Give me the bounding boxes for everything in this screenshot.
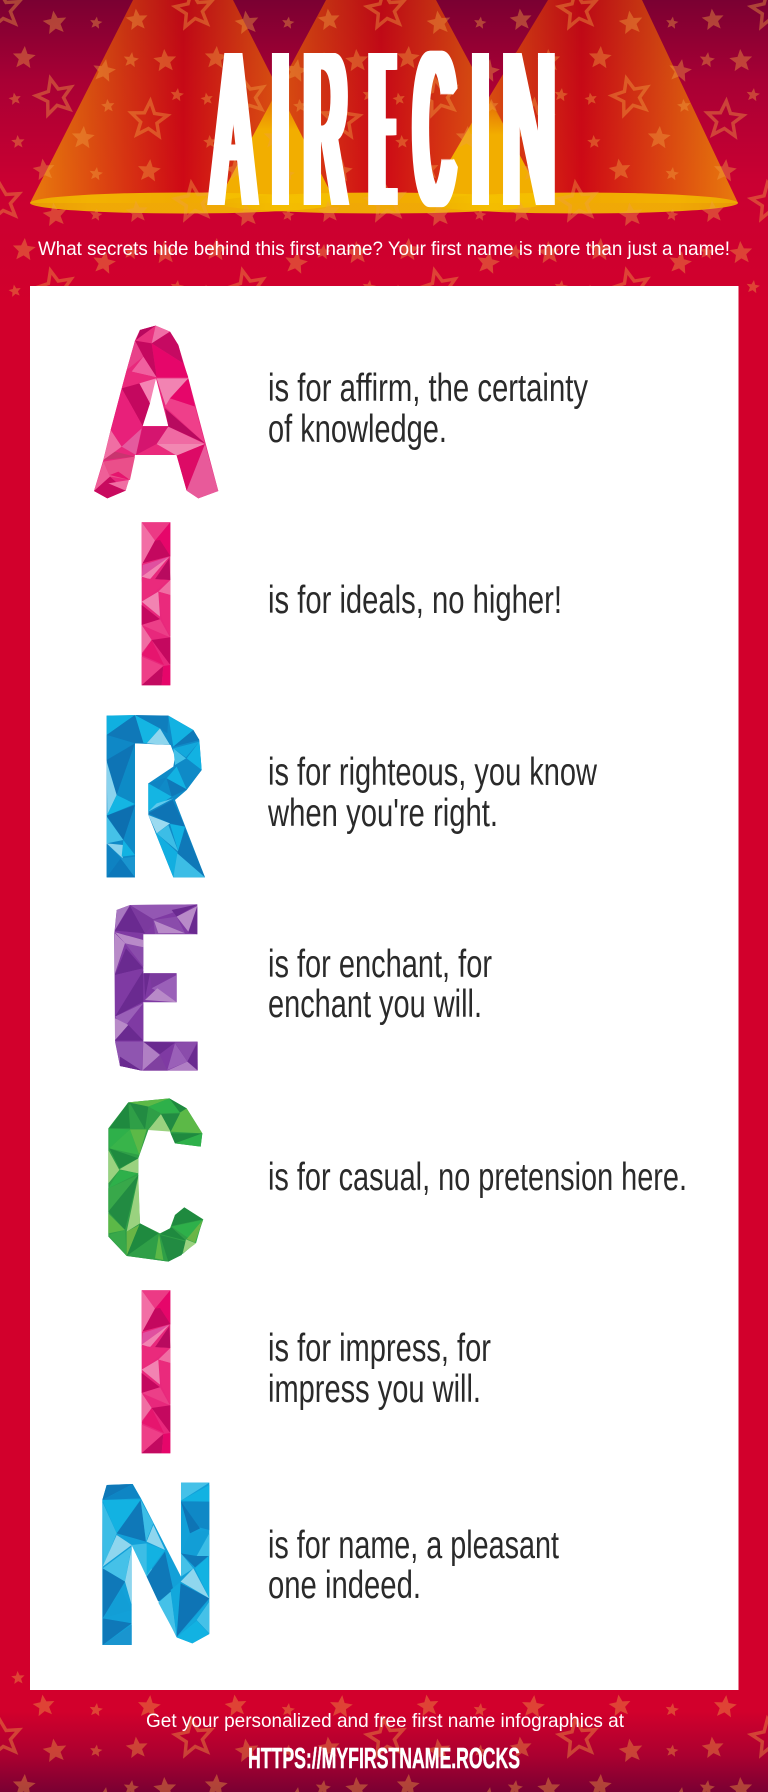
text: A meaning: of knowledge. xyxy=(268,408,447,451)
panel: letter meanings xyxy=(30,286,738,1690)
spotlights xyxy=(30,0,738,214)
icon: letter I pink xyxy=(142,522,170,685)
title: R xyxy=(299,5,340,252)
title: I xyxy=(255,5,306,252)
subtitle: What secrets hide behind this first name? Your first name is more than just a name! xyxy=(38,238,730,260)
text: N meaning: is for name, a pleasant xyxy=(268,1524,559,1567)
icon: letter N blue xyxy=(102,1483,209,1645)
star pattern top xyxy=(0,0,768,300)
text: E meaning: enchant you will. xyxy=(268,983,482,1026)
icon: letter A pink xyxy=(94,326,218,498)
text: N meaning xyxy=(268,1524,559,1607)
title: E xyxy=(366,5,384,252)
text: second I meaning xyxy=(268,1327,491,1411)
star pattern bottom xyxy=(0,1668,768,1792)
text: second I meaning: impress you will. xyxy=(268,1368,481,1411)
title: N xyxy=(497,5,551,252)
text: second I meaning: is for impress, for xyxy=(268,1327,491,1370)
text: I meaning: is for ideals, no higher! xyxy=(268,579,562,622)
text: A meaning: is for affirm, the certainty xyxy=(268,367,588,410)
text: E meaning xyxy=(268,943,492,1026)
icon: letter R blue xyxy=(107,715,205,877)
icon: letter C green xyxy=(108,1098,203,1262)
title xyxy=(207,5,555,252)
footer call to action: Get your personalized and free first name infographics at xyxy=(146,1710,625,1732)
footer url: HTTPS://MYFIRSTNAME.ROCKS xyxy=(248,1743,520,1775)
title: A xyxy=(207,5,248,252)
title: C xyxy=(409,5,448,252)
text: E meaning: is for enchant, for xyxy=(268,943,492,986)
icon: second letter I pink xyxy=(142,1290,170,1453)
title: I xyxy=(455,5,506,252)
text: R meaning xyxy=(267,751,598,835)
icon: letter E purple xyxy=(114,904,198,1071)
text: R meaning: when you're right. xyxy=(267,792,498,835)
text: N meaning: one indeed. xyxy=(268,1564,421,1607)
text: R meaning: is for righteous, you know xyxy=(268,751,598,794)
text: A meaning xyxy=(268,367,588,451)
